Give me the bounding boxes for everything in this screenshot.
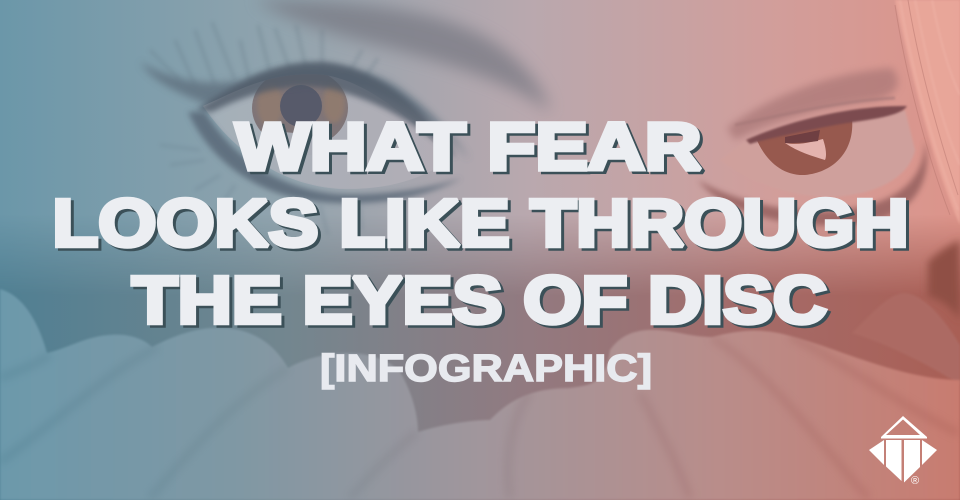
logo [869,416,937,487]
creases between fingers [0,336,958,498]
right eye lashes [746,106,907,144]
lower lid lashes [188,112,462,203]
title [52,110,912,340]
right eye [720,98,915,197]
logo: ® [911,475,919,487]
left eye lash cloud [140,22,470,160]
title text: THE EYES OF DISC [132,263,827,338]
right eye socket shadow [698,140,927,225]
title text shadow [56,112,912,340]
hands: mass of fingers [0,289,960,500]
left eyebrow [255,0,550,112]
right brow fold [727,68,898,140]
dark corner at lower right of the hair [928,240,960,320]
title text shadow: THE EYES OF DISC [135,266,830,340]
title text: WHAT FEAR [236,110,702,184]
title text [52,110,909,338]
title text: LOOKS LIKE THROUGH [52,186,909,261]
subtitle: [INFOGRAPHIC]: [INFOGRAPHIC] [320,348,652,390]
title text shadow: LOOKS LIKE THROUGH [56,188,912,264]
title text shadow: WHAT FEAR [238,112,704,187]
top right finger [852,293,960,385]
hair [895,0,960,225]
left eye [188,58,457,210]
upper lid lashes [196,62,456,158]
lower face shadow behind fingers [0,200,960,500]
